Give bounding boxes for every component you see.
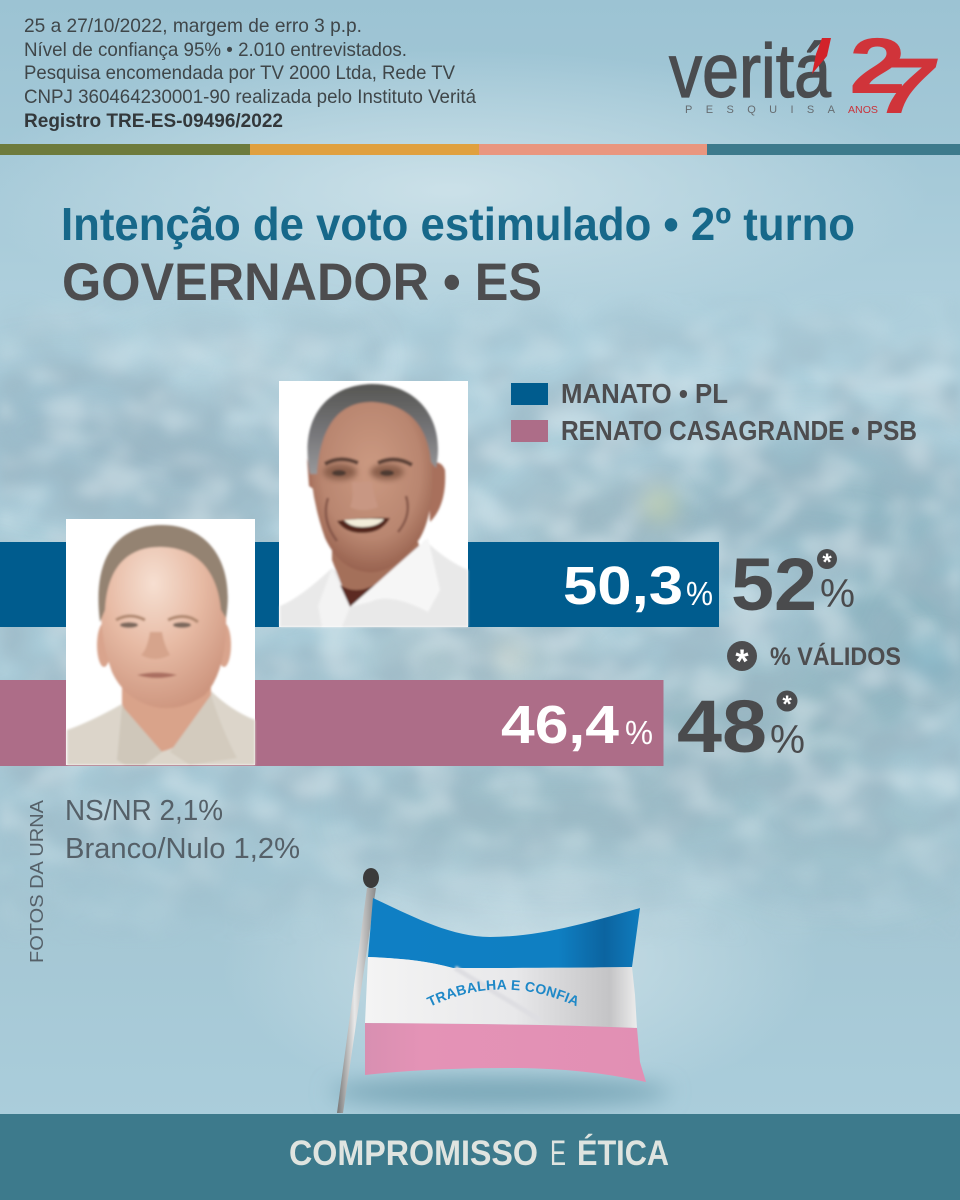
legend: [511, 378, 917, 446]
footer slogan: [289, 1133, 669, 1173]
header: survey details: Registro TRE-ES-09496/2022: [24, 110, 283, 132]
header: survey details: CNPJ 360464230001-90 realizada pelo Instituto Veritá: [24, 86, 476, 108]
footer band: [0, 1114, 960, 1200]
header: survey details: Nível de confiança 95% • 2.010 entrevistados.: [24, 39, 407, 61]
other answers: [65, 795, 300, 865]
footer slogan: COMPROMISSO: [289, 1134, 538, 1173]
value: Manato 50,3%: %: [686, 575, 713, 612]
legend: MANATO • PL: [561, 378, 728, 409]
photo credit: FOTOS DA URNA: [26, 799, 47, 963]
value: Manato valid 52%: [731, 543, 855, 626]
title: Intenção de voto estimulado • 2º turno: [61, 198, 855, 250]
other answers: Branco/Nulo 1,2%: [65, 833, 300, 865]
value: Casagrande valid 48%: *: [782, 691, 792, 718]
photo: Casagrande: [66, 519, 255, 765]
note: valid percent: % VÁLIDOS: [770, 642, 901, 671]
logo: Veritá 27 anos: 7: [878, 41, 939, 130]
colour stripe: [0, 144, 960, 155]
legend: RENATO CASAGRANDE • PSB: [561, 415, 917, 446]
footer slogan: ÉTICA: [577, 1133, 669, 1173]
logo: Veritá 27 anos: [669, 21, 939, 130]
logo: Veritá 27 anos: veritá: [669, 29, 832, 114]
header: survey details: Pesquisa encomendada por TV 2000 Ltda, Rede TV: [24, 62, 455, 84]
value: Casagrande 46,4%: %: [625, 714, 653, 751]
photo: Manato: [279, 381, 468, 627]
note: valid percent: [727, 641, 901, 681]
note: valid percent: *: [735, 643, 749, 681]
value: Casagrande valid 48%: 48: [677, 685, 767, 768]
flag: Espírito Santo: [337, 868, 646, 1113]
logo: Veritá 27 anos: 2: [849, 21, 906, 110]
value: Manato valid 52%: *: [822, 549, 832, 576]
value: Casagrande valid 48%: [677, 685, 805, 768]
footer slogan: E: [550, 1134, 566, 1173]
header: survey details: [24, 15, 476, 132]
bar: Manato: [0, 542, 719, 627]
header: survey details: 25 a 27/10/2022, margem de erro 3 p.p.: [24, 15, 362, 37]
other answers: NS/NR 2,1%: [65, 795, 223, 827]
value: Manato 50,3%: 50,3: [563, 556, 683, 616]
logo: Veritá 27 anos: ANOS: [848, 104, 878, 116]
logo: Veritá 27 anos: PESQUISA: [685, 104, 836, 116]
bar: Casagrande: [0, 680, 664, 766]
flag: Espírito Santo: TRABALHA E CONFIA: [426, 980, 577, 1006]
subtitle: GOVERNADOR • ES: [62, 253, 542, 312]
value: Casagrande valid 48%: %: [770, 718, 805, 762]
value: Manato valid 52%: %: [820, 572, 855, 616]
value: Manato valid 52%: 52: [731, 543, 817, 626]
flag shadow: [330, 1077, 670, 1107]
value: Casagrande 46,4%: 46,4: [501, 695, 619, 755]
value: Casagrande 46,4%: [501, 695, 653, 755]
